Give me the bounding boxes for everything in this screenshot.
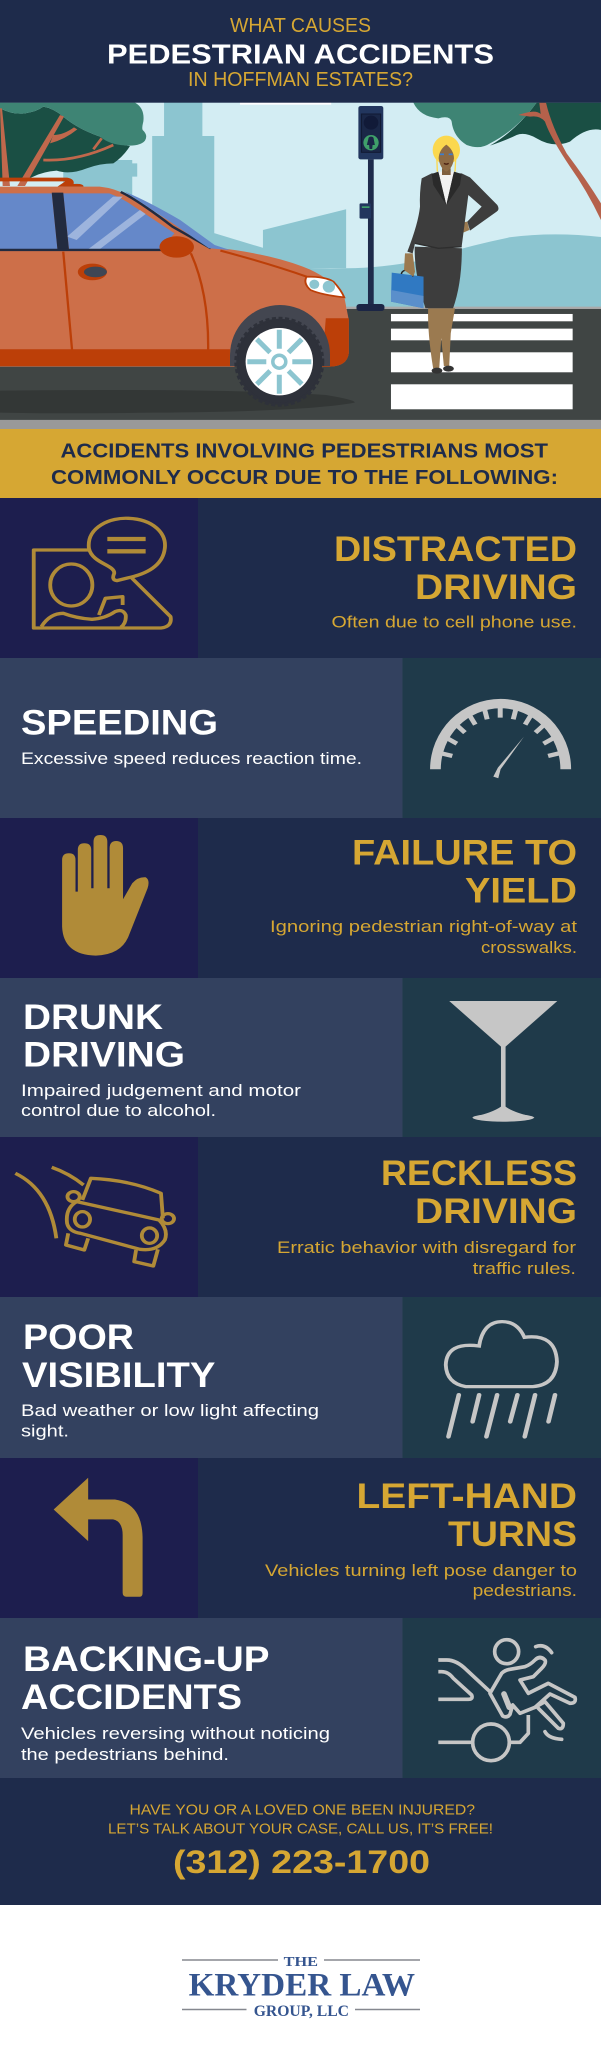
panel: reckless driving: DRIVING [415,1192,577,1231]
panel: backing-up accidents: Vehicles reversing without noticing [21,1724,330,1743]
logo: The Kryder Law Group: THE [284,1955,318,1970]
header: title block [0,0,601,103]
panel: left-hand turns: TURNS [448,1515,577,1554]
icon: speedometer [430,699,571,778]
icon: martini glass [449,1001,557,1122]
panel: reckless driving: Erratic behavior with disregard for [277,1238,576,1257]
woman with briefcase [391,136,499,374]
panel: left-hand turns: LEFT-HAND [356,1477,577,1516]
banner: intro heading: ACCIDENTS INVOLVING PEDESTRIANS MOST [60,441,548,463]
footer: call to action [0,1778,601,1905]
skyline buildings and hills [0,102,601,309]
panel: left-hand turns: Vehicles turning left pose danger to [265,1561,577,1580]
road, curb and crosswalk [0,307,601,429]
icon: left turn arrow [54,1478,143,1597]
panel: drunk driving: DRIVING [23,1036,185,1075]
panel: drunk driving: control due to alcohol. [21,1101,216,1120]
panel: speeding [0,658,601,818]
panel: backing-up accidents: BACKING-UP [23,1640,270,1679]
panel: drunk driving: DRUNK [23,998,163,1037]
header: title block: WHAT CAUSES [230,15,371,37]
panel: speeding: Excessive speed reduces reaction time. [21,749,362,768]
footer: call to action: LET’S TALK ABOUT YOUR CASE, CALL US, IT’S FREE! [108,1821,493,1838]
panel: backing-up accidents: ACCIDENTS [21,1678,242,1717]
panel: left-hand turns [0,1458,601,1618]
icon: swerving car [15,1167,174,1266]
panel: distracted driving [0,498,601,658]
panel: failure to yield: YIELD [465,872,577,911]
panel: reckless driving: traffic rules. [473,1259,576,1278]
illustration: street scene [0,102,601,429]
footer: call to action: (312) 223-1700 [173,1844,430,1880]
icon: raised hand [62,835,149,956]
panel: drunk driving: Impaired judgement and motor [21,1081,301,1100]
panel: distracted driving: Often due to cell phone use. [332,613,577,632]
panel: poor visibility: POOR [23,1318,134,1357]
panel: poor visibility [0,1297,601,1458]
panel: left-hand turns: pedestrians. [473,1581,577,1600]
panel: poor visibility: Bad weather or low light affecting [21,1401,319,1420]
panel: speeding: SPEEDING [21,703,218,742]
header: title block: PEDESTRIAN ACCIDENTS [107,38,494,69]
logo: The Kryder Law Group: GROUP, LLC [254,2003,349,2020]
panel: distracted driving: DRIVING [415,568,577,607]
header: title block: IN HOFFMAN ESTATES? [188,69,413,91]
traffic signal [356,106,384,311]
car wheel [230,305,330,405]
panel: failure to yield: FAILURE TO [352,833,577,872]
panel: poor visibility: sight. [21,1422,69,1441]
logo: The Kryder Law Group [182,1955,420,2020]
panel: failure to yield [0,818,601,978]
panel: drunk driving [0,978,601,1137]
banner: intro heading: COMMONLY OCCUR DUE TO THE FOLLOWING: [51,467,558,489]
icon: rain cloud [446,1322,557,1437]
panel: poor visibility: VISIBILITY [22,1356,215,1395]
footer: call to action: HAVE YOU OR A LOVED ONE BEEN INJURED? [130,1802,475,1819]
panel: distracted driving: DISTRACTED [334,530,577,569]
right tree [413,103,601,220]
left tree [0,103,146,186]
panel: backing-up accidents: the pedestrians behind. [21,1745,229,1764]
logo: The Kryder Law Group: KRYDER LAW [189,1968,415,2004]
panel: failure to yield: crosswalks. [481,938,577,957]
panel: reckless driving [0,1137,601,1297]
panel: backing-up accidents [0,1618,601,1778]
panel: reckless driving: RECKLESS [381,1154,577,1193]
car body [0,178,349,367]
icon: phone user with speech bubble [34,518,171,628]
banner: intro heading [0,429,601,498]
panel: failure to yield: Ignoring pedestrian right-of-way at [270,917,577,936]
icon: car striking pedestrian [438,1640,575,1761]
